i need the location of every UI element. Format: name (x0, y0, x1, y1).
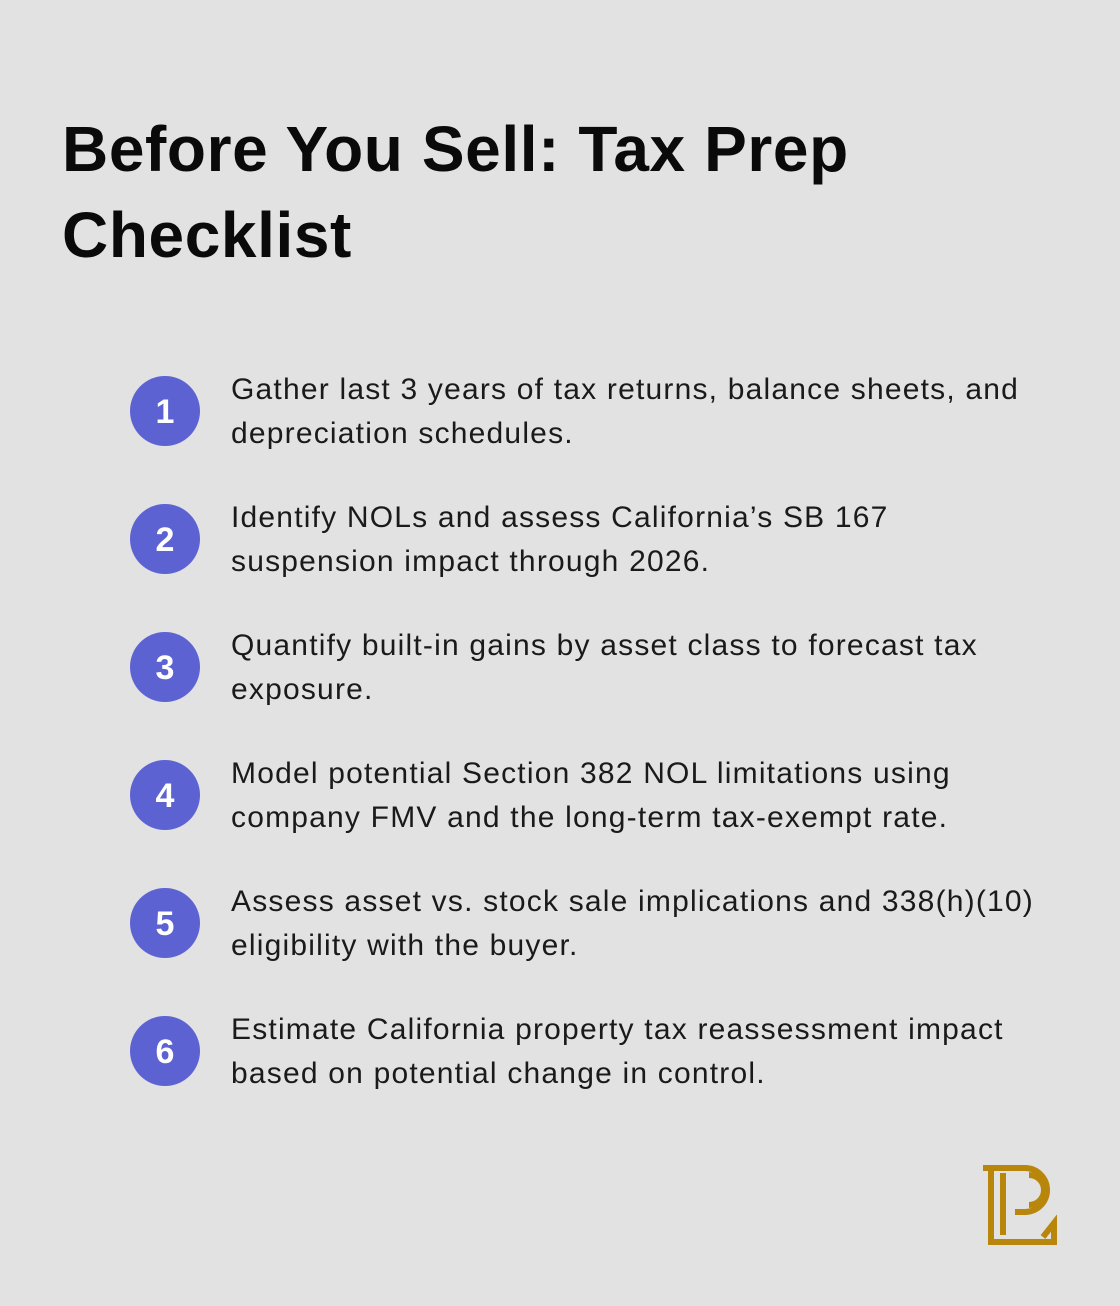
item 4: 4 (156, 777, 174, 815)
title: Checklist (62, 199, 352, 271)
item 1: 1 (156, 393, 174, 431)
item 1: Gather last 3 years of tax returns, balance sheets, and depreciation schedules. (231, 373, 1019, 450)
item 4: Model potential Section 382 NOL limitations using company FMV and the long-term tax-exempt rate. (231, 757, 951, 834)
item 3: 3 (156, 649, 174, 687)
title (62, 113, 849, 271)
item 6: 6 (156, 1033, 174, 1071)
item 2: Identify NOLs and assess California’s SB 167 suspension impact through 2026. (231, 501, 889, 578)
item 3: Quantify built-in gains by asset class to forecast tax exposure. (231, 629, 978, 706)
item 2: 2 (156, 521, 174, 559)
item 5: Assess asset vs. stock sale implications and 338(h)(10) eligibility with the buyer. (231, 885, 1034, 962)
logo (983, 1165, 1057, 1245)
item 5: 5 (156, 905, 174, 943)
title: Before You Sell: Tax Prep (62, 113, 849, 185)
item 6: Estimate California property tax reassessment impact based on potential change in control. (231, 1013, 1004, 1090)
